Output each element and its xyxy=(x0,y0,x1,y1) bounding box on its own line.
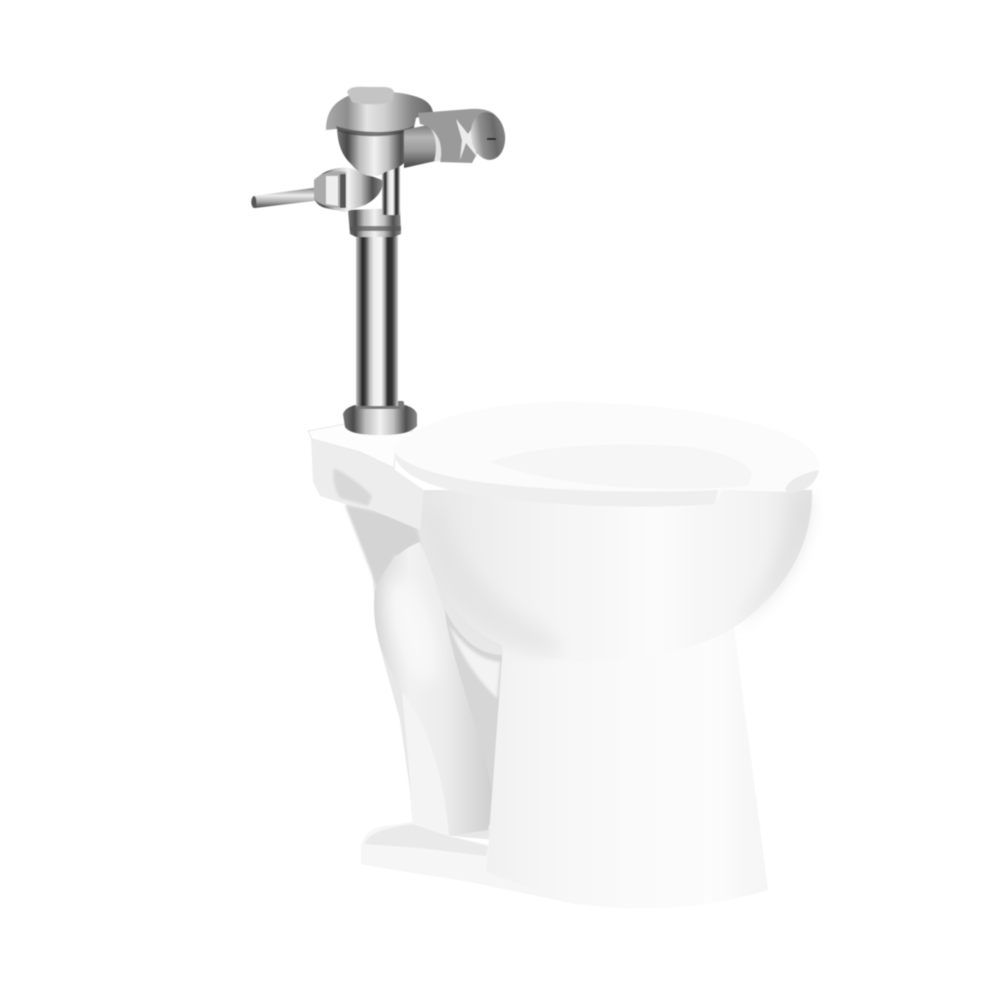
vacuum breaker housing xyxy=(418,109,497,163)
collar xyxy=(348,208,401,237)
button logo mark xyxy=(487,138,496,140)
seat rim xyxy=(394,402,819,507)
neck xyxy=(382,165,400,215)
deck xyxy=(308,425,424,530)
seat tab xyxy=(785,470,819,493)
rear column xyxy=(345,500,503,840)
bowl left shading xyxy=(425,510,560,653)
dome xyxy=(326,92,433,133)
trap bulge xyxy=(374,542,492,836)
inner recess highlight xyxy=(449,625,500,698)
foot xyxy=(361,822,580,905)
flush valve xyxy=(251,87,508,435)
button xyxy=(468,110,508,162)
lower column fold xyxy=(402,692,449,836)
foot top xyxy=(364,824,488,856)
top cap xyxy=(347,87,394,104)
lever handle xyxy=(251,187,322,208)
valve body xyxy=(337,125,412,176)
star detail xyxy=(456,119,478,160)
base flange xyxy=(343,403,417,435)
gap behind trap xyxy=(445,610,503,830)
handle coupling xyxy=(314,168,383,212)
rear shadow under deck xyxy=(345,505,425,590)
pedestal xyxy=(486,620,768,909)
deck notch xyxy=(333,468,372,506)
seat outer edge xyxy=(394,452,718,507)
toilet body xyxy=(308,402,819,909)
side ring xyxy=(428,122,442,162)
bowl xyxy=(420,490,812,661)
seat opening xyxy=(490,445,752,489)
dome lower band xyxy=(336,126,414,136)
coupling nut xyxy=(314,171,346,208)
bowl right shading xyxy=(735,495,812,628)
riser pipe xyxy=(356,236,398,406)
side cylinder xyxy=(404,124,440,168)
trap lobe highlight xyxy=(376,572,448,688)
